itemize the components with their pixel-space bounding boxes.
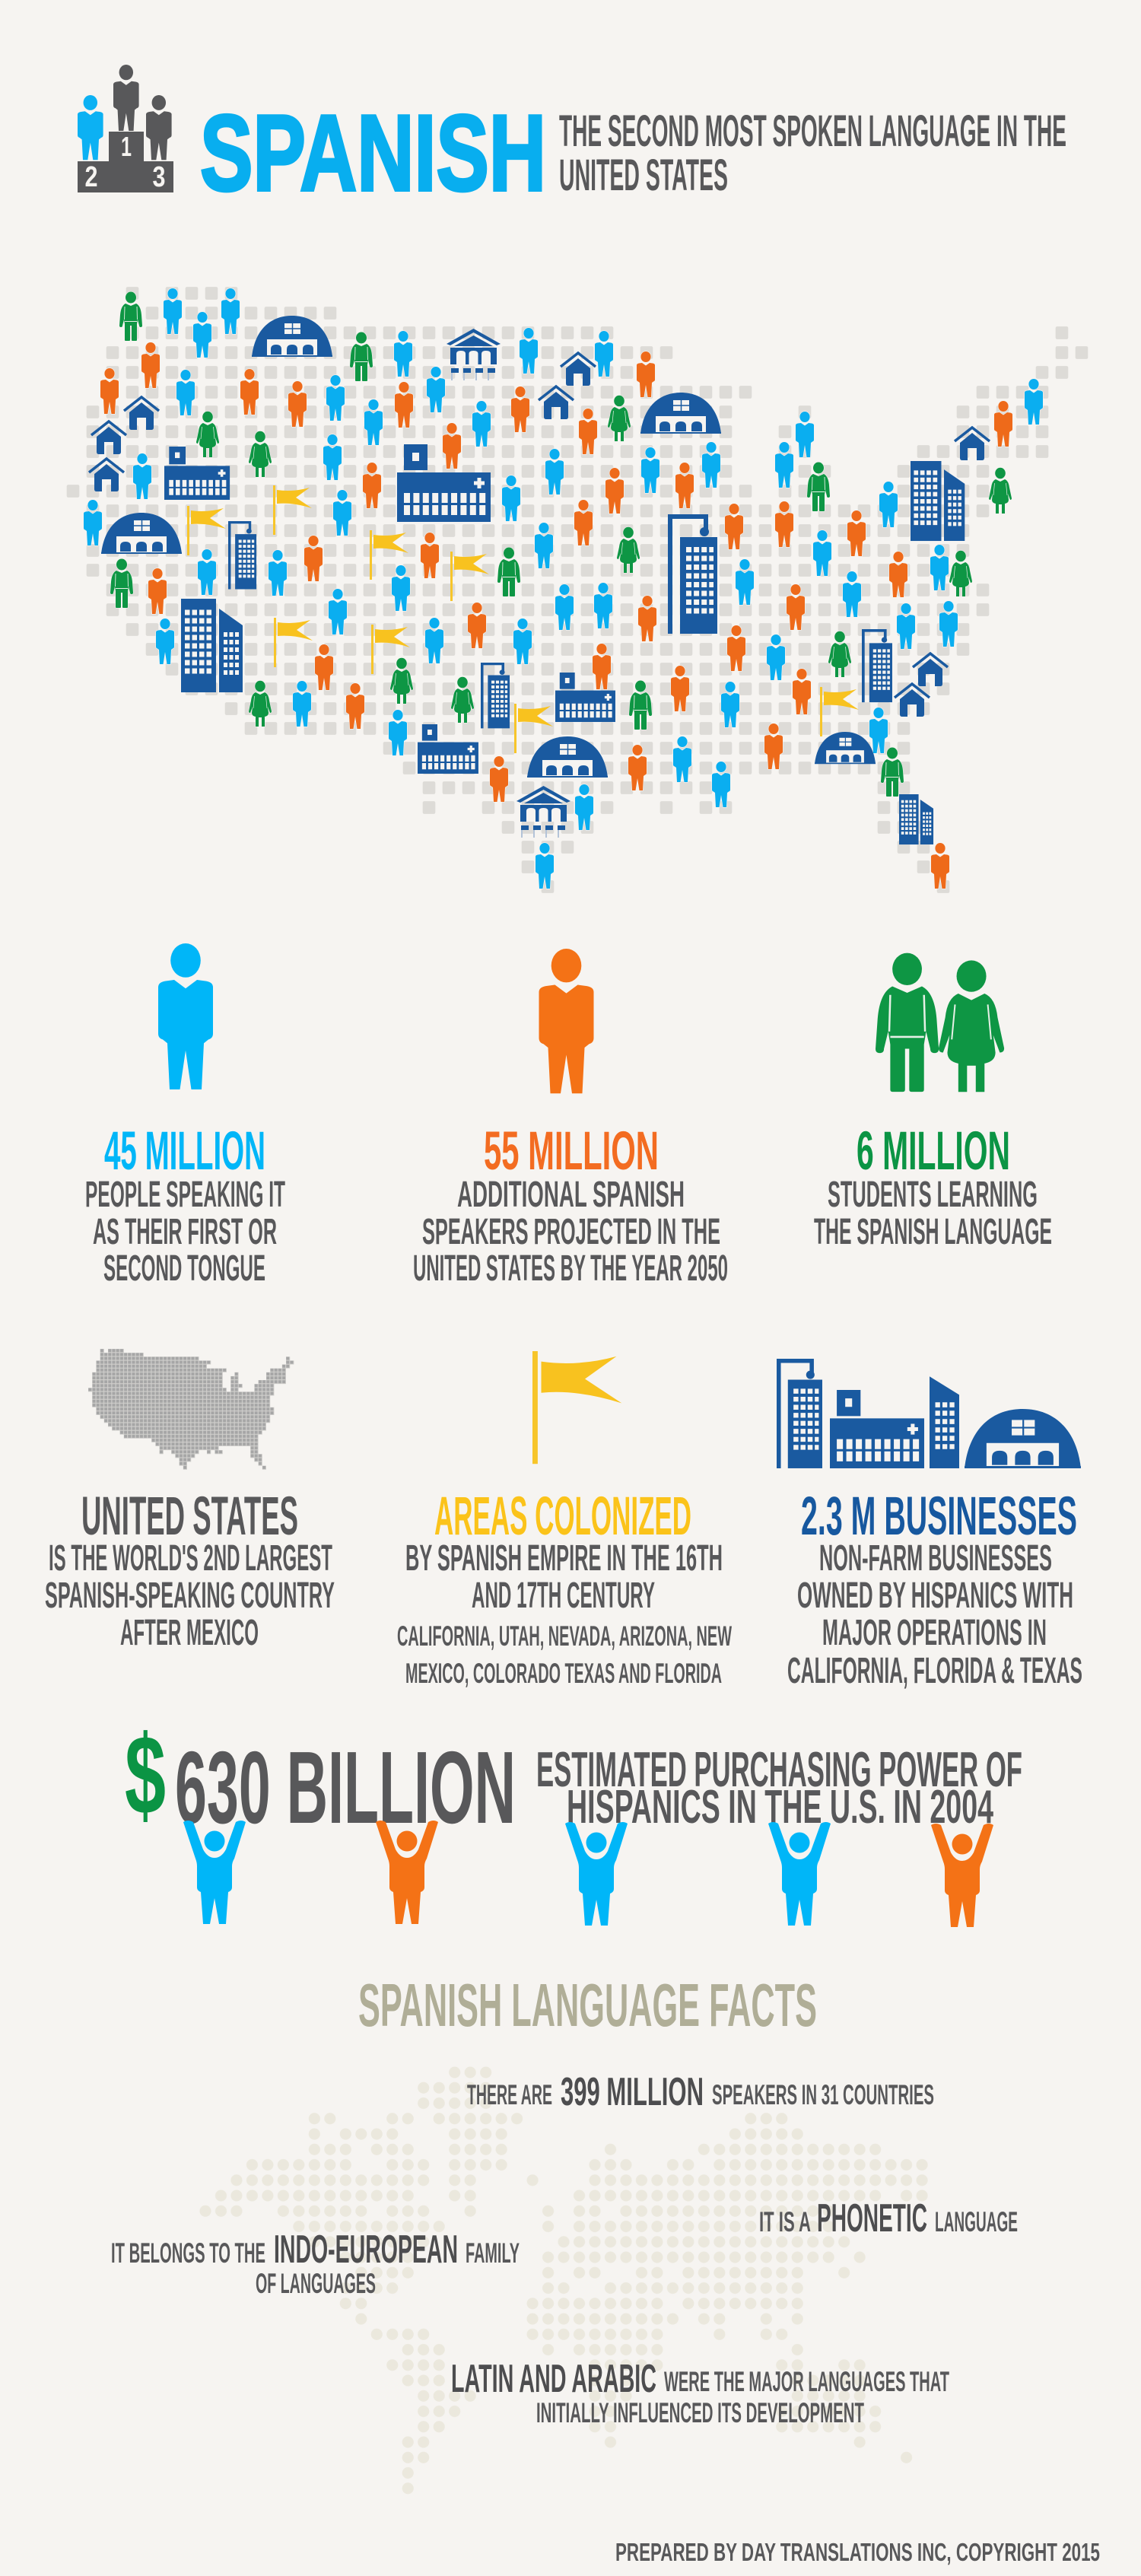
stat text bbox=[413, 1175, 728, 1289]
header bbox=[78, 65, 1066, 214]
stat text: MEXICO, COLORADO TEXAS AND FLORIDA bbox=[405, 1658, 722, 1689]
stat text: BY SPANISH EMPIRE IN THE 16TH bbox=[405, 1538, 723, 1579]
icons: people holding up the text bbox=[183, 1821, 993, 1927]
amount: 630 BILLION bbox=[175, 1730, 516, 1845]
panel: 55 million bbox=[413, 949, 728, 1289]
panel: 6 million bbox=[814, 953, 1052, 1252]
icon: business buildings bbox=[779, 1361, 1081, 1468]
dollar sign: $ bbox=[125, 1713, 166, 1838]
people: green students bbox=[110, 292, 1012, 797]
stat text: CALIFORNIA, UTAH, NEVADA, ARIZONA, NEW bbox=[397, 1620, 732, 1652]
icon: small dotted map bbox=[88, 1349, 294, 1470]
fact: speakers: THERE ARE bbox=[467, 2079, 552, 2110]
fact: phonetic: LANGUAGE bbox=[935, 2206, 1018, 2237]
description bbox=[536, 1741, 1022, 1833]
text: UNITED STATES BY THE YEAR 2050 bbox=[413, 1248, 728, 1289]
icon: podium with three people: 1 bbox=[121, 131, 132, 162]
subtitle: UNITED STATES bbox=[559, 151, 728, 200]
stat text: SPANISH-SPEAKING COUNTRY bbox=[45, 1576, 335, 1616]
people: orange bbox=[100, 342, 1012, 889]
fact: speakers: SPEAKERS IN 31 COUNTRIES bbox=[712, 2079, 934, 2110]
panel: language facts bbox=[111, 1971, 1018, 2496]
icon: yellow flag bbox=[532, 1351, 621, 1464]
stat text bbox=[787, 1538, 1082, 1691]
icons: towers bbox=[230, 517, 892, 728]
dotted world map bbox=[198, 2065, 930, 2496]
icon: blue person bbox=[158, 943, 213, 1089]
stat text: PEOPLE SPEAKING IT bbox=[85, 1175, 285, 1215]
stat text bbox=[85, 1175, 285, 1289]
stat heading: 55 MILLION bbox=[484, 1121, 659, 1181]
fact: speakers bbox=[467, 2070, 934, 2114]
panel: 2.3 M businesses bbox=[779, 1361, 1082, 1691]
fact: speakers: 399 MILLION bbox=[561, 2070, 704, 2114]
chart: dot-grid map of the United States with icons bbox=[63, 283, 1092, 896]
icons: houses bbox=[89, 353, 990, 717]
icon: podium with three people: 2 bbox=[85, 161, 97, 193]
stat text: ADDITIONAL SPANISH bbox=[457, 1175, 685, 1215]
map grid bbox=[63, 283, 1092, 896]
fact: phonetic: PHONETIC bbox=[817, 2196, 927, 2240]
stat text: AS THEIR FIRST OR bbox=[93, 1212, 277, 1252]
fact: latin and arabic: LATIN AND ARABIC bbox=[451, 2357, 656, 2401]
fact: latin and arabic: INITIALLY INFLUENCED ITS DEVELOPMENT bbox=[536, 2397, 864, 2428]
stat text: IS THE WORLD'S 2ND LARGEST bbox=[49, 1538, 332, 1579]
icon: podium with three people: 3 bbox=[152, 161, 166, 193]
fact: indo-european: IT BELONGS TO THE bbox=[111, 2237, 265, 2269]
icons: barns bbox=[101, 316, 876, 778]
stat text bbox=[814, 1175, 1052, 1252]
fact: indo-european: OF LANGUAGES bbox=[256, 2268, 376, 2299]
stat heading: UNITED STATES bbox=[81, 1487, 298, 1547]
stat text: SPEAKERS PROJECTED IN THE bbox=[422, 1212, 720, 1252]
fact: indo-european: INDO-EUROPEAN bbox=[274, 2228, 458, 2272]
icons: office blocks bbox=[181, 461, 965, 844]
fact: indo-european: FAMILY bbox=[466, 2237, 520, 2269]
fact: latin and arabic bbox=[451, 2357, 949, 2428]
panel: purchasing power bbox=[125, 1713, 1022, 1927]
title: SPANISH bbox=[200, 93, 546, 214]
stat text bbox=[397, 1538, 732, 1689]
icons: flags bbox=[187, 485, 859, 753]
icon: podium with three people bbox=[78, 65, 173, 193]
stat text: AFTER MEXICO bbox=[120, 1613, 259, 1653]
icons: churches bbox=[447, 329, 570, 838]
subtitle bbox=[559, 107, 1066, 200]
stat text: SECOND TONGUE bbox=[103, 1248, 265, 1289]
fact: phonetic: IT IS A bbox=[759, 2206, 811, 2237]
icon: orange person bbox=[539, 949, 593, 1093]
panel: areas colonized: AREAS COLONIZED bbox=[434, 1487, 691, 1547]
panel: United States bbox=[45, 1349, 335, 1653]
panel: areas colonized bbox=[397, 1351, 732, 1689]
fact: indo-european bbox=[111, 2228, 520, 2299]
icon: two students bbox=[876, 953, 1004, 1092]
people: blue bbox=[84, 288, 1043, 889]
stat heading: 6 MILLION bbox=[857, 1121, 1010, 1181]
stat text: AND 17TH CENTURY bbox=[472, 1576, 655, 1616]
stat heading: 45 MILLION bbox=[104, 1121, 265, 1181]
stat text bbox=[45, 1538, 335, 1653]
panel: 45 million bbox=[85, 943, 285, 1289]
icons: hospitals bbox=[164, 444, 615, 774]
